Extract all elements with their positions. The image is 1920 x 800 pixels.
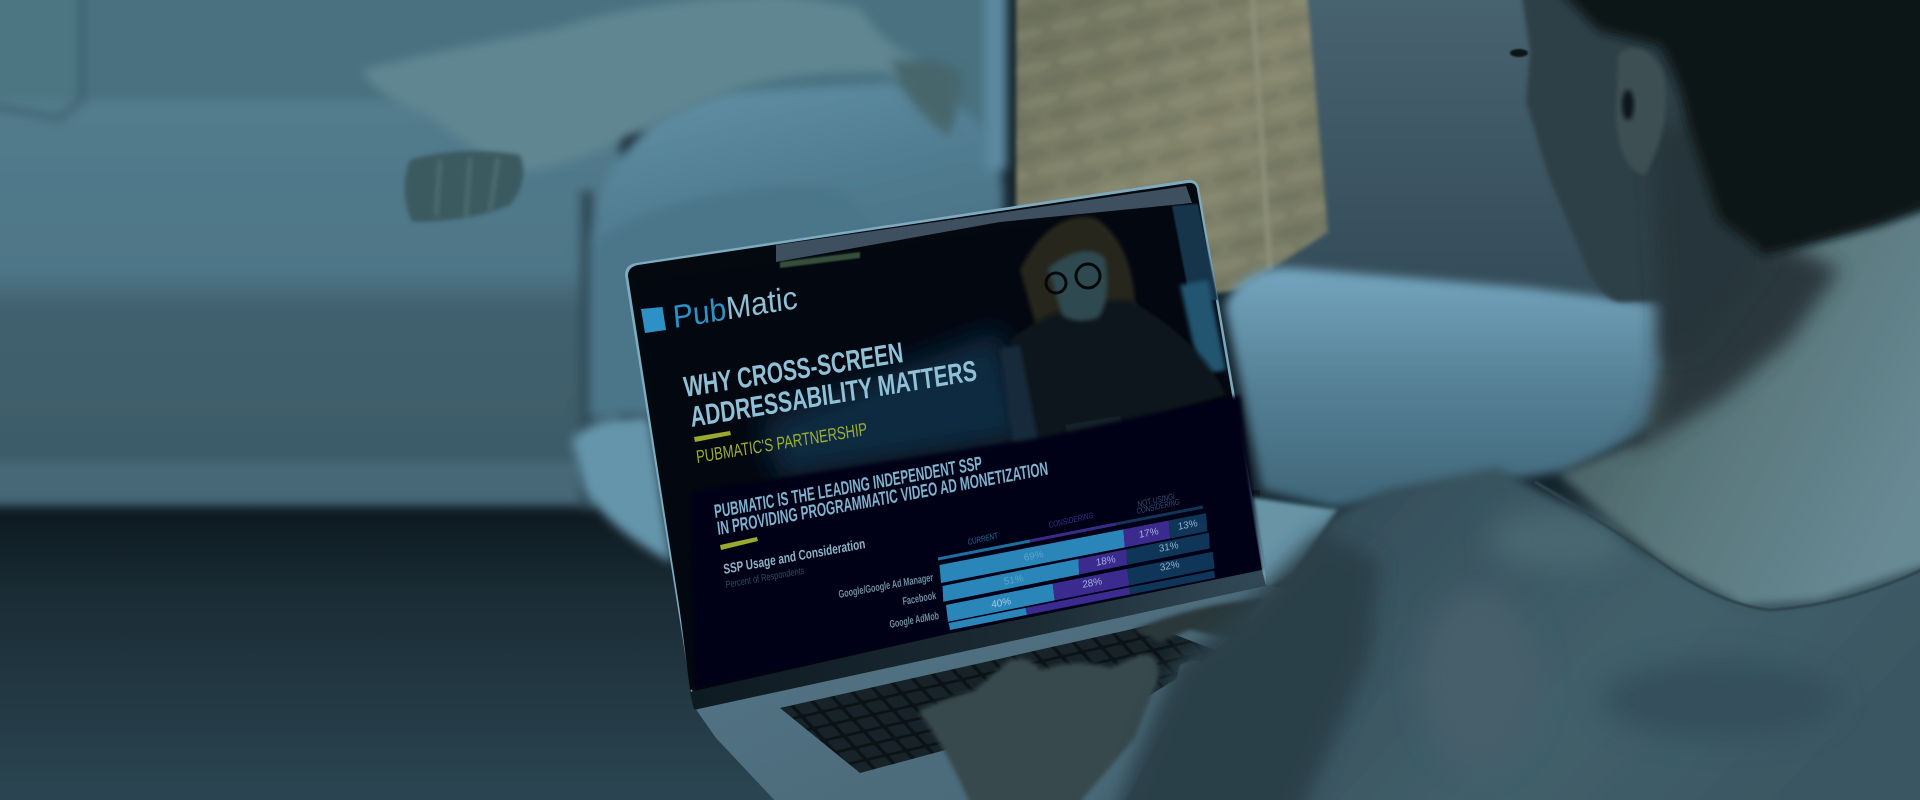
section heading xyxy=(713,453,1049,540)
screen display xyxy=(638,203,1258,690)
window xyxy=(1172,204,1218,300)
lid chin xyxy=(690,570,1266,710)
column headers: CURRENT xyxy=(967,530,998,547)
shoulder and shirt xyxy=(1102,467,1920,800)
chart subtitle: Percent of Respondents xyxy=(725,566,805,591)
column headers: CONSIDERING xyxy=(1136,496,1180,516)
section heading: IN PROVIDING PROGRAMMATIC VIDEO AD MONETIZATION xyxy=(716,459,1049,540)
reflection band xyxy=(776,186,1192,262)
value labels: 18% xyxy=(1095,554,1116,569)
hero image xyxy=(760,204,1226,480)
typing hand xyxy=(918,655,1159,800)
woman in hero image xyxy=(1010,217,1226,450)
reflected sticky note xyxy=(780,252,860,268)
foot in sock xyxy=(572,416,672,563)
value labels: 32% xyxy=(1159,559,1180,574)
logo wordmark: PubMatic xyxy=(671,279,799,335)
eyelashes xyxy=(1510,49,1528,57)
thumb xyxy=(1176,661,1205,685)
throw pillow xyxy=(362,0,962,172)
value labels: 40% xyxy=(991,596,1012,611)
row labels: Facebook xyxy=(902,590,937,608)
neck shadow xyxy=(1622,240,1840,452)
value labels: 17% xyxy=(1138,526,1159,541)
screen title: WHY CROSS-SCREEN xyxy=(682,337,905,404)
face xyxy=(1521,0,1720,302)
header rules xyxy=(938,507,1203,559)
far fingers xyxy=(1133,598,1265,642)
value labels: 51% xyxy=(1003,573,1024,588)
row labels: Google AdMob xyxy=(889,610,940,631)
stacked bar chart xyxy=(838,491,1215,631)
row 1 xyxy=(940,513,1208,583)
row 4 xyxy=(949,571,1215,630)
value labels: 28% xyxy=(1082,576,1103,591)
column headers xyxy=(967,491,1180,547)
neckline trim xyxy=(1535,482,1920,610)
row labels xyxy=(838,572,940,631)
value labels: 13% xyxy=(1177,518,1198,533)
logo xyxy=(641,279,799,335)
right sofa arm xyxy=(1225,268,1670,508)
screen title: ADDRESSABILITY MATTERS xyxy=(688,355,979,434)
lid silver edge xyxy=(625,180,1266,710)
hero glow behind title xyxy=(760,330,1030,480)
neck dark fill xyxy=(1650,120,1770,360)
woven lamp xyxy=(1016,0,1328,320)
value labels: 31% xyxy=(1158,540,1179,555)
pillow tassel xyxy=(404,151,523,222)
hand with phone xyxy=(1065,416,1125,440)
chart title: SSP Usage and Consideration xyxy=(722,535,866,577)
keyboard xyxy=(780,625,1220,773)
row 2 xyxy=(942,533,1210,602)
laptop base xyxy=(695,584,1290,800)
bed sheet behind laptop xyxy=(1250,497,1338,590)
section heading: PUBMATIC IS THE LEADING INDEPENDENT SSP xyxy=(713,453,983,523)
hair xyxy=(1020,217,1150,410)
value labels xyxy=(991,518,1198,611)
upper back skin xyxy=(1558,200,1920,607)
hands xyxy=(918,598,1265,800)
logo square xyxy=(641,307,666,333)
lower report panel xyxy=(691,395,1262,688)
face xyxy=(1048,251,1107,321)
hair xyxy=(1549,0,1920,255)
value labels: 69% xyxy=(1023,549,1044,564)
wall xyxy=(1260,0,1760,320)
shirt sleeve overlap xyxy=(1102,530,1380,800)
person xyxy=(1102,0,1920,800)
floor xyxy=(0,490,1260,800)
row 3 xyxy=(946,552,1215,622)
row labels: Google/Google Ad Manager xyxy=(838,572,934,601)
green accent xyxy=(694,431,731,442)
glasses xyxy=(1046,264,1100,293)
ear xyxy=(1616,48,1666,175)
laptop silhouette in hero xyxy=(1000,345,1040,455)
sofa xyxy=(0,0,1007,510)
column headers: CONSIDERING xyxy=(1048,510,1094,530)
column headers: NOT USING/ xyxy=(1137,491,1176,509)
green accent 2 xyxy=(720,537,758,550)
screen subtitle: PUBMATIC'S PARTNERSHIP xyxy=(695,419,868,467)
sweater xyxy=(1010,300,1226,450)
bezel xyxy=(628,183,1263,702)
laptop xyxy=(625,180,1290,800)
shirt mottling xyxy=(1420,510,1840,770)
seam between cushions xyxy=(0,0,82,118)
